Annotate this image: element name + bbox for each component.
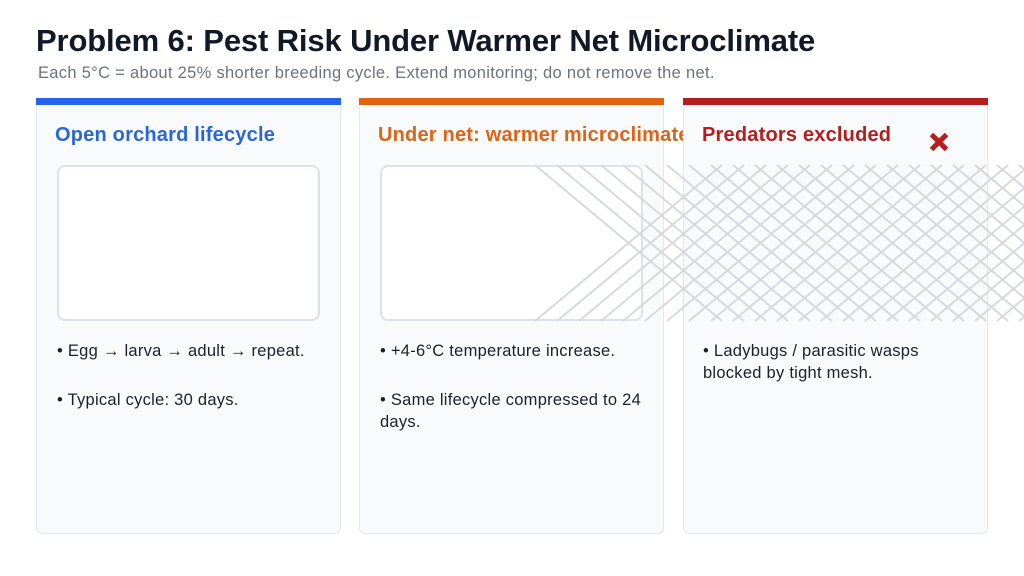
heading: predators excluded: Predators excluded bbox=[702, 124, 891, 146]
text: lifecycle stages: • Egg → larva → adult → repeat. bbox=[57, 342, 305, 360]
panel accent bar: red bbox=[683, 98, 988, 105]
text: compressed lifecycle: • Same lifecycle compressed to 24 bbox=[380, 391, 641, 409]
subtitle: Each 5°C = about 25% shorter breeding cycle. Extend monitoring; do not remove the net. bbox=[38, 64, 715, 82]
text: predators blocked: blocked by tight mesh. bbox=[703, 364, 873, 382]
panel: open orchard lifecycle bbox=[36, 98, 341, 534]
heading: open orchard lifecycle: Open orchard lifecycle bbox=[55, 124, 275, 146]
title: Problem 6: Pest Risk Under Warmer Net Microclimate bbox=[36, 23, 815, 58]
panel accent bar: blue bbox=[36, 98, 341, 105]
diagram box: under net bbox=[380, 165, 643, 321]
text: compressed lifecycle: days. bbox=[380, 412, 421, 430]
text: predators blocked bbox=[703, 342, 919, 382]
text: compressed lifecycle bbox=[380, 391, 641, 430]
text: temperature increase: • +4-6°C temperature increase. bbox=[380, 342, 615, 360]
panel: predators excluded bbox=[683, 98, 988, 534]
icon: red cross bbox=[930, 132, 948, 152]
text: predators blocked: • Ladybugs / parasitic wasps bbox=[703, 342, 919, 360]
empty diagram box: open orchard bbox=[57, 165, 320, 321]
heading: under net: Under net: warmer microclimate bbox=[378, 124, 690, 146]
panel accent bar: orange bbox=[359, 98, 664, 105]
panel: under net bbox=[359, 98, 664, 534]
text: typical cycle: • Typical cycle: 30 days. bbox=[57, 391, 239, 409]
